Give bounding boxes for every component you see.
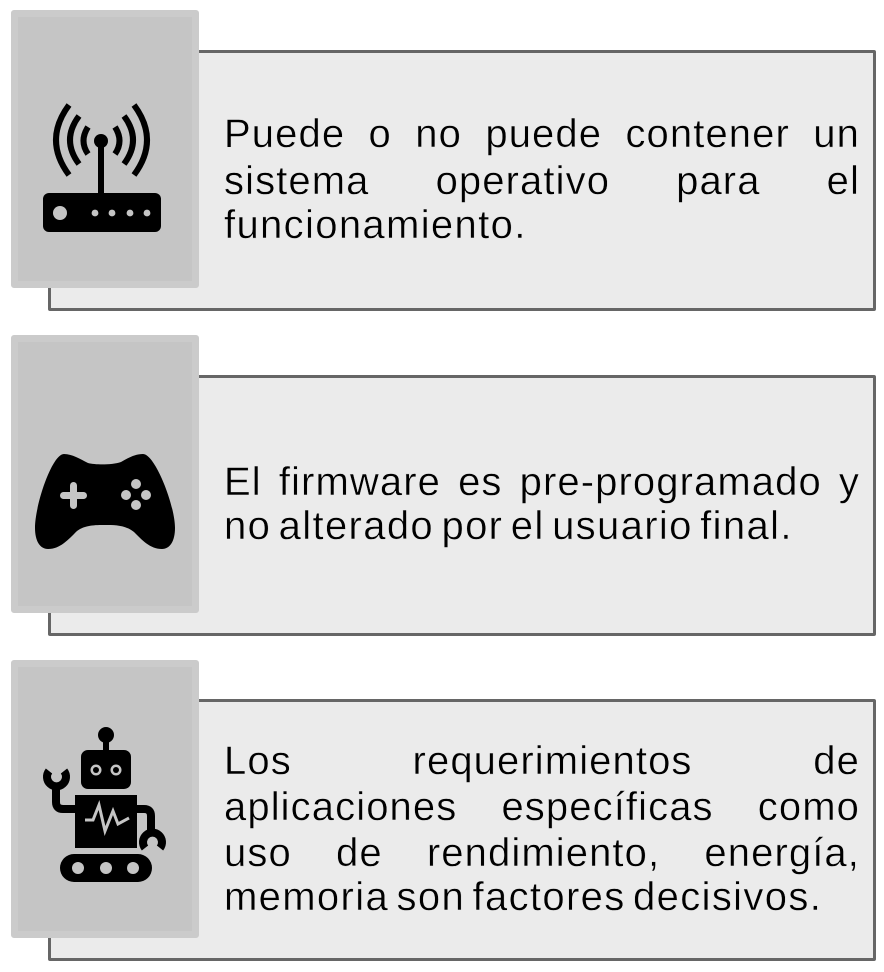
text: operating system: funcionamiento. xyxy=(224,203,527,247)
text: firmware xyxy=(224,460,860,548)
icon tile: game controller xyxy=(11,335,199,613)
icon tile: robot xyxy=(11,660,199,938)
panel: operating system xyxy=(48,50,876,311)
text: requirements: memoria son factores decisivos. xyxy=(224,875,822,919)
text: firmware: El firmware es pre-programado y xyxy=(224,460,860,504)
text: requirements: Los requerimientos de xyxy=(224,739,860,783)
text: operating system: sistema operativo para el xyxy=(224,159,860,203)
text: operating system: Puede o no puede contener un xyxy=(224,112,860,156)
text: firmware: no alterado por el usuario final. xyxy=(224,504,793,548)
text: requirements xyxy=(224,739,860,919)
text: requirements: uso de rendimiento, energía, xyxy=(224,831,860,875)
panel: firmware xyxy=(48,375,876,636)
icon tile: router xyxy=(11,10,199,288)
text: operating system xyxy=(224,112,860,247)
text: requirements: aplicaciones específicas como xyxy=(224,785,860,829)
panel: requirements xyxy=(48,699,876,961)
